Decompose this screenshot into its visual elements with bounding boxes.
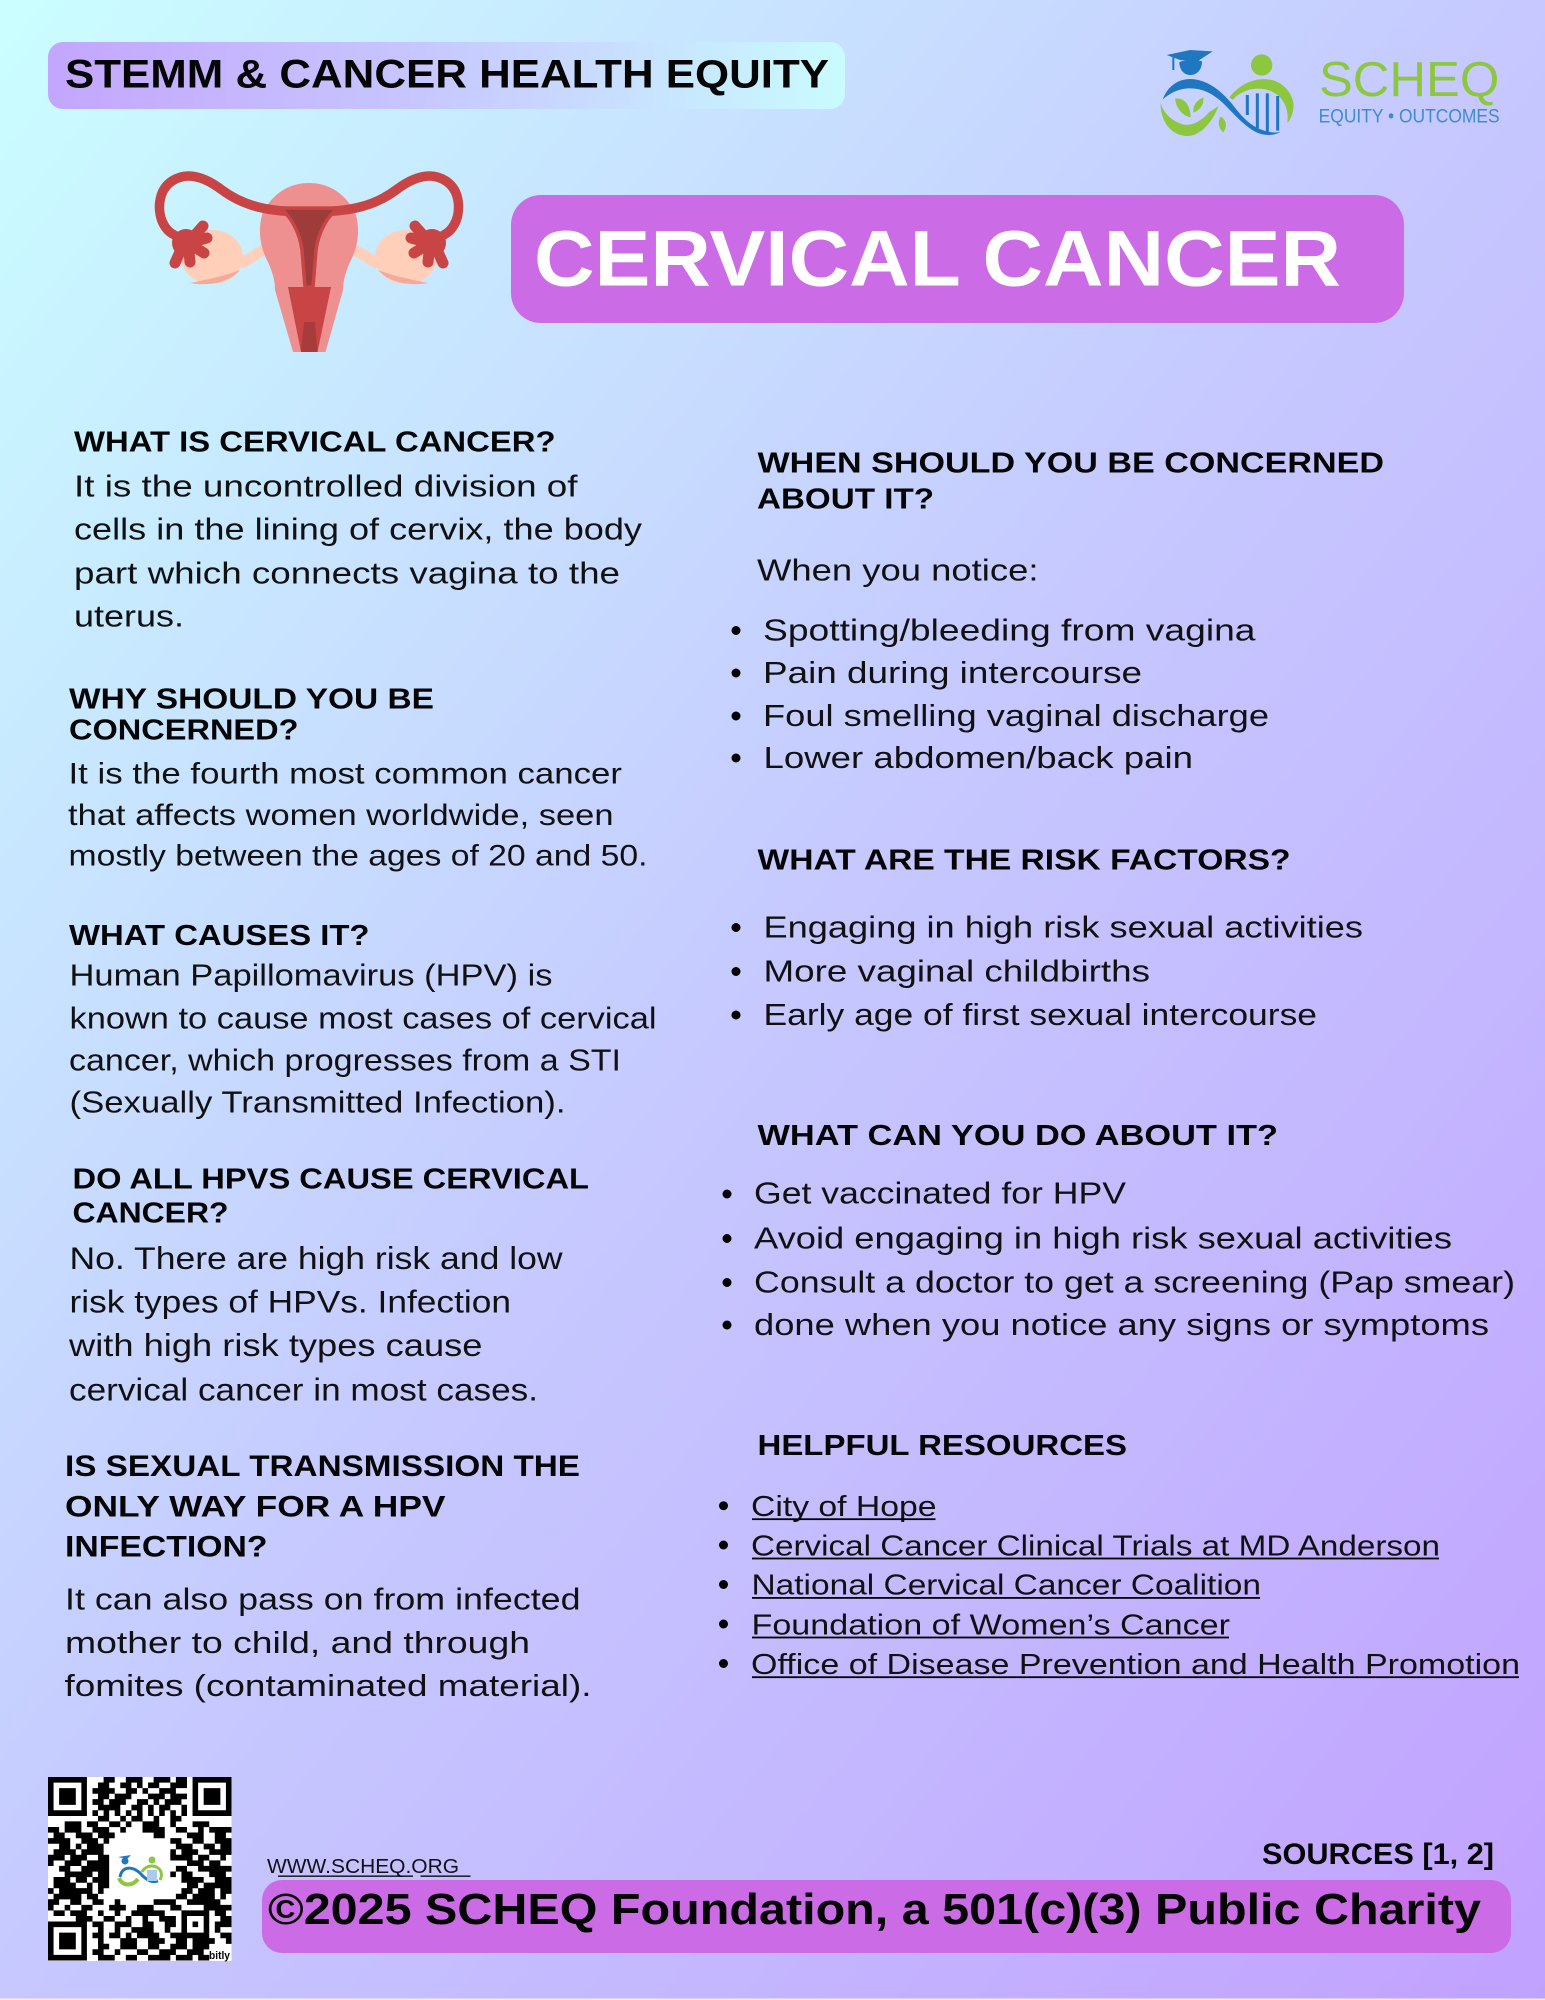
heading: HELPFUL RESOURCES	[758, 1430, 1127, 1462]
section: what is cervical cancer	[74, 427, 643, 634]
sources label: SOURCES [1, 2]	[1262, 1838, 1494, 1871]
heading	[72, 1163, 589, 1229]
symptom list: Spotting/bleeding from vagina	[763, 613, 1256, 647]
heading: INFECTION?	[65, 1531, 268, 1564]
heading: CANCER?	[72, 1197, 228, 1229]
icon: left ovary and tube	[172, 226, 268, 284]
body text	[69, 959, 656, 1119]
resource links: City of Hope	[751, 1491, 936, 1523]
icon: vaginal canal	[288, 287, 331, 352]
title panel: CERVICAL CANCER	[534, 214, 1341, 302]
action list: Avoid engaging in high risk sexual activities	[754, 1220, 1452, 1255]
body text: mother to child, and through	[65, 1625, 530, 1660]
body text: cervical cancer in most cases.	[69, 1372, 538, 1408]
section: why should you be concerned	[68, 683, 648, 873]
heading	[65, 1450, 580, 1564]
heading: DO ALL HPVS CAUSE CERVICAL	[72, 1163, 589, 1195]
body text: cells in the lining of cervix, the body	[74, 512, 643, 547]
heading: WHY SHOULD YOU BE	[69, 683, 434, 715]
heading: WHAT IS CERVICAL CANCER?	[74, 427, 556, 459]
heading: WHAT CAUSES IT?	[69, 920, 370, 952]
symptom list: Pain during intercourse	[763, 656, 1142, 690]
section: when should you be concerned	[732, 447, 1384, 775]
icon: right ovary	[350, 226, 446, 284]
body text: risk types of HPVs. Infection	[70, 1283, 511, 1319]
heading: ABOUT IT?	[757, 483, 934, 515]
section: risk factors	[732, 845, 1363, 1032]
heading	[757, 447, 1384, 515]
body text: with high risk types cause	[68, 1327, 483, 1363]
risk list: Engaging in high risk sexual activities	[764, 910, 1363, 944]
action list: Get vaccinated for HPV	[754, 1175, 1126, 1210]
text: bitly mark: bitly	[209, 1950, 231, 1962]
body text: mostly between the ages of 20 and 50.	[68, 840, 648, 873]
footer bar: ©2025 SCHEQ Foundation, a 501(c)(3) Public Charity	[268, 1885, 1482, 1934]
body text: No. There are high risk and low	[70, 1240, 563, 1276]
body text	[68, 1240, 563, 1408]
body text	[64, 1582, 592, 1703]
illustration: uterus	[159, 176, 459, 352]
QR code	[48, 1777, 232, 1962]
title panel	[511, 195, 1404, 323]
section: helpful resources	[719, 1430, 1520, 1681]
body text: that affects women worldwide, seen	[68, 799, 614, 832]
heading	[69, 683, 434, 746]
logo: SCHEQ: EQUITY • OUTCOMES	[1319, 106, 1500, 127]
body text	[74, 469, 643, 634]
icon: QR centre logo	[118, 1855, 161, 1885]
icon: fallopian tubes	[159, 176, 459, 238]
body text: It can also pass on from infected	[65, 1582, 580, 1616]
symptom list: Foul smelling vaginal discharge	[763, 699, 1269, 733]
body text: It is the fourth most common cancer	[68, 757, 622, 790]
body text: fomites (contaminated material).	[64, 1668, 592, 1703]
icon: uterine cavity	[279, 208, 339, 287]
body text: Human Papillomavirus (HPV) is	[70, 959, 552, 993]
heading: WHAT ARE THE RISK FACTORS?	[758, 845, 1290, 877]
logo: SCHEQ: SCHEQ	[1319, 53, 1499, 107]
logo: SCHEQ	[1161, 50, 1500, 136]
icon: uterus body	[260, 183, 358, 352]
footer bar	[262, 1880, 1511, 1953]
tagline pill	[48, 42, 845, 109]
tagline pill: STEMM & CANCER HEALTH EQUITY	[65, 52, 829, 96]
heading: WHEN SHOULD YOU BE CONCERNED	[758, 447, 1384, 479]
body text: It is the uncontrolled division of	[74, 469, 578, 504]
body text: known to cause most cases of cervical	[70, 1001, 656, 1035]
intro text: When you notice:	[757, 553, 1038, 587]
body text: cancer, which progresses from a STI	[69, 1044, 621, 1078]
heading: ONLY WAY FOR A HPV	[65, 1491, 446, 1524]
risk list: Early age of first sexual intercourse	[764, 998, 1317, 1032]
heading: CONCERNED?	[69, 714, 298, 746]
section: do all HPVs cause cervical cancer	[68, 1163, 589, 1408]
symptom list: Lower abdomen/back pain	[764, 741, 1193, 775]
risk list	[732, 910, 1363, 1032]
body text	[68, 757, 648, 873]
action list: Consult a doctor to get a screening (Pap smear)	[754, 1264, 1515, 1299]
heading: IS SEXUAL TRANSMISSION THE	[65, 1450, 580, 1483]
resource links	[719, 1491, 1520, 1681]
action list: done when you notice any signs or symptoms	[754, 1307, 1489, 1342]
website link: WWW.SCHEQ.ORG	[267, 1856, 459, 1878]
resource links: National Cervical Cancer Coalition	[752, 1570, 1261, 1602]
body text: (Sexually Transmitted Infection).	[70, 1085, 566, 1119]
resource links: Foundation of Women’s Cancer	[752, 1609, 1230, 1641]
section: what causes it	[69, 920, 656, 1119]
body text: uterus.	[74, 599, 184, 634]
resource links: Office of Disease Prevention and Health Promotion	[751, 1649, 1520, 1681]
section: what can you do	[722, 1120, 1515, 1342]
risk list: More vaginal childbirths	[764, 955, 1150, 989]
symptom list	[732, 613, 1269, 775]
section: is sexual transmission the only way	[64, 1450, 592, 1703]
resource links: Cervical Cancer Clinical Trials at MD Anderson	[751, 1530, 1440, 1562]
action list	[722, 1175, 1515, 1342]
heading: WHAT CAN YOU DO ABOUT IT?	[758, 1120, 1278, 1152]
body text: part which connects vagina to the	[74, 555, 620, 590]
